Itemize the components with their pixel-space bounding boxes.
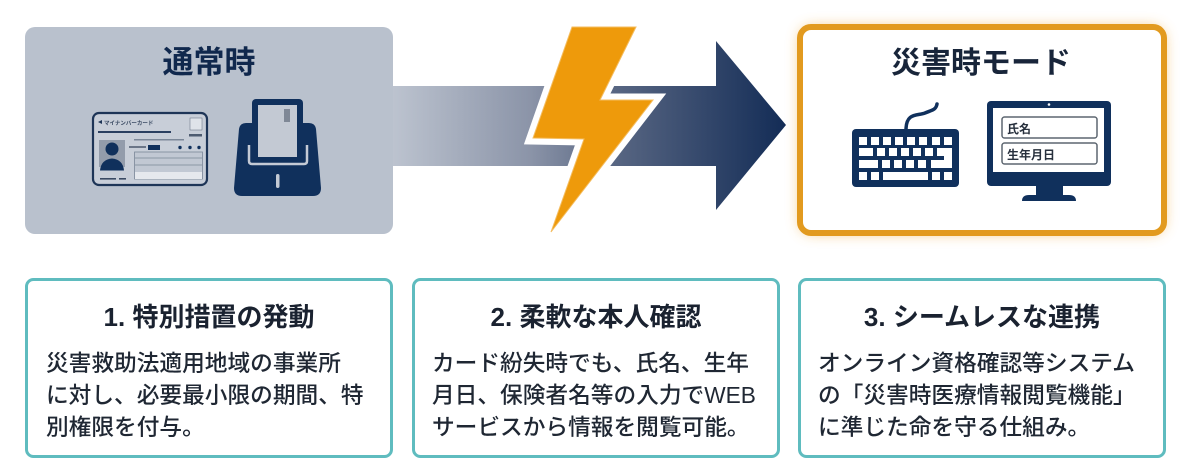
icon: keyboard xyxy=(852,104,959,187)
icon: my number card: マイナンバーカード xyxy=(104,120,153,127)
card 1 body: 別権限を付与。 xyxy=(46,414,205,440)
card 2 heading: 2. 柔軟な本人確認 xyxy=(491,302,701,332)
form field: date of birth: 生年月日 xyxy=(1007,147,1055,162)
card 2 body: カード紛失時でも、氏名、生年 xyxy=(432,350,749,376)
icon: card reader xyxy=(234,99,321,196)
panel: normal mode xyxy=(25,27,393,234)
card 1: special measures xyxy=(26,280,392,456)
card 3 body: オンライン資格確認等システム xyxy=(818,350,1135,376)
card 3 heading: 3. シームレスな連携 xyxy=(864,302,1100,332)
form field: name: 氏名 xyxy=(1007,121,1031,136)
card 2 body xyxy=(432,350,756,440)
card 1 heading: 1. 特別措置の発動 xyxy=(104,302,314,332)
card 3 body: の「災害時医療情報閲覧機能」 xyxy=(818,382,1136,408)
card 1 body xyxy=(46,350,364,440)
card 2 body: サービスから情報を閲覧可能。 xyxy=(432,414,750,440)
heading: normal mode: 通常時 xyxy=(162,45,256,80)
panel: disaster mode xyxy=(800,27,1164,233)
card 1 body: 災害救助法適用地域の事業所 xyxy=(46,350,341,376)
card 2 body: 月日、保険者名等の入力でWEB xyxy=(432,382,756,408)
icon: monitor with input form xyxy=(987,101,1111,201)
icon: lightning bolt xyxy=(533,27,653,232)
icon: my number card xyxy=(93,113,207,185)
heading: disaster mode: 災害時モード xyxy=(891,47,1071,80)
arrow: transition to disaster mode xyxy=(393,41,786,210)
card 2: flexible identity check xyxy=(414,280,778,456)
card 3 body xyxy=(818,350,1136,440)
card 3 body: に準じた命を守る仕組み。 xyxy=(818,414,1090,440)
card 1 body: に対し、必要最小限の期間、特 xyxy=(46,382,364,408)
card 3: seamless integration xyxy=(800,280,1164,456)
